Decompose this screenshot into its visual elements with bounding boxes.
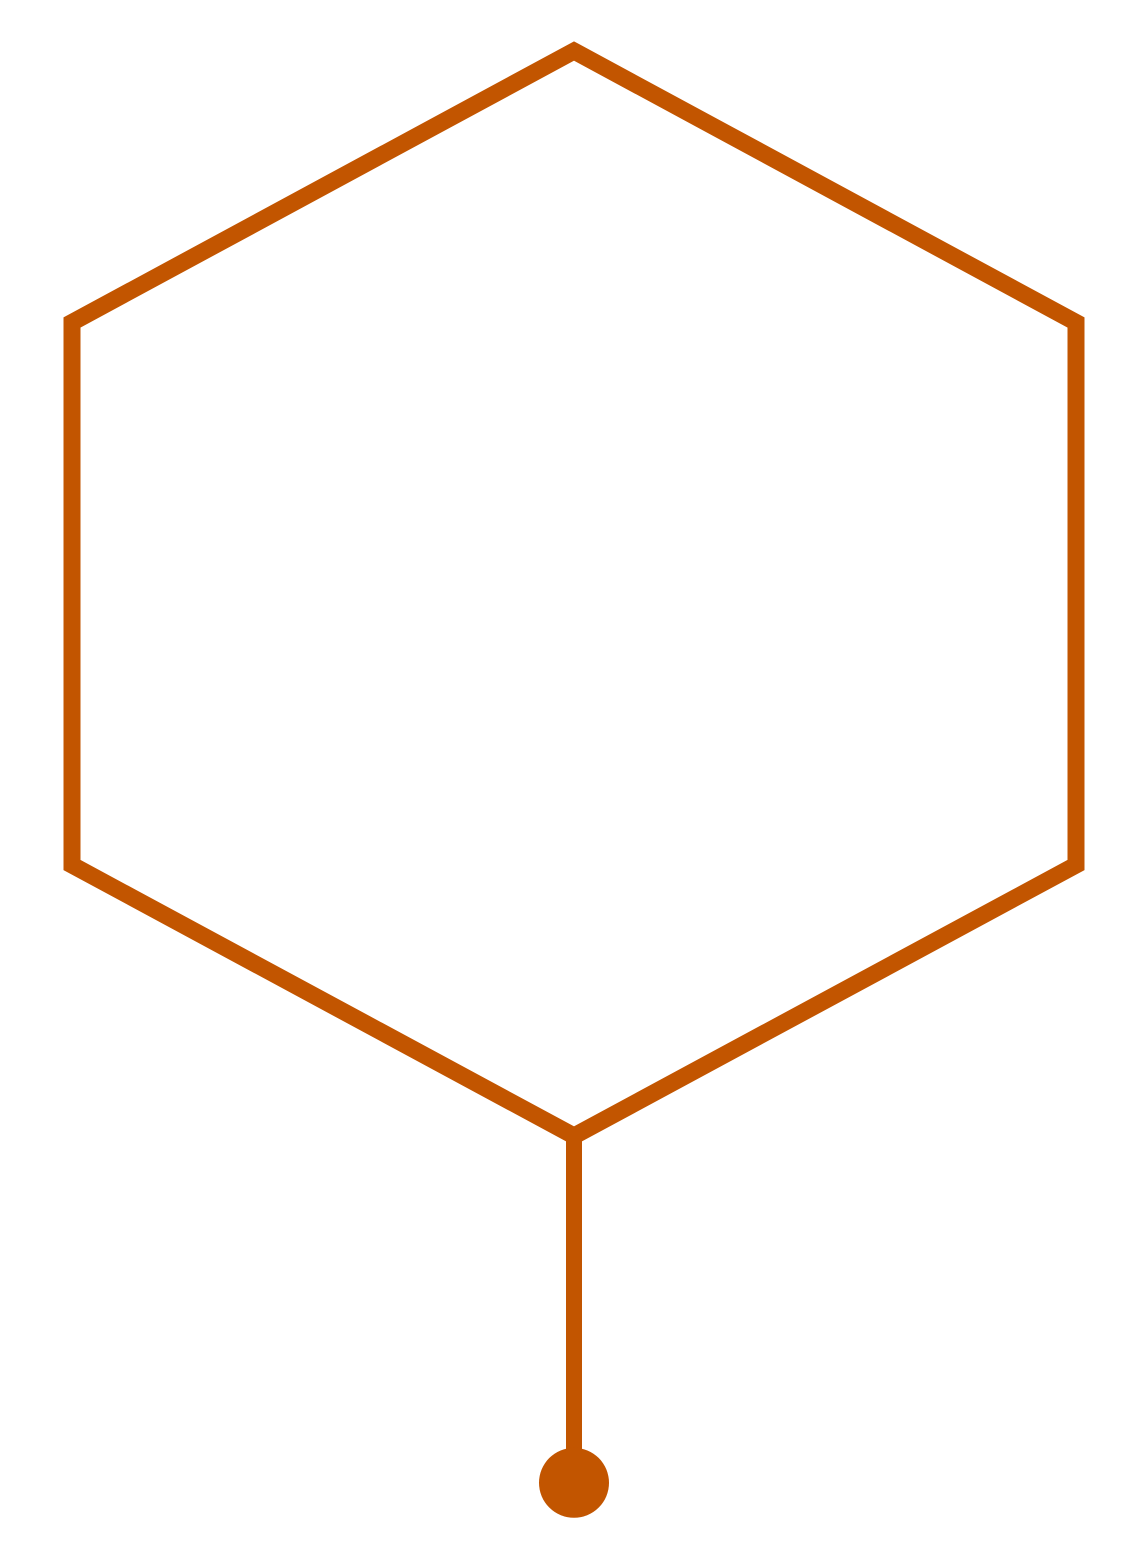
connector line bbox=[566, 1134, 582, 1474]
terminal dot bbox=[539, 1448, 609, 1518]
hexagon outline bbox=[72, 51, 1076, 1136]
